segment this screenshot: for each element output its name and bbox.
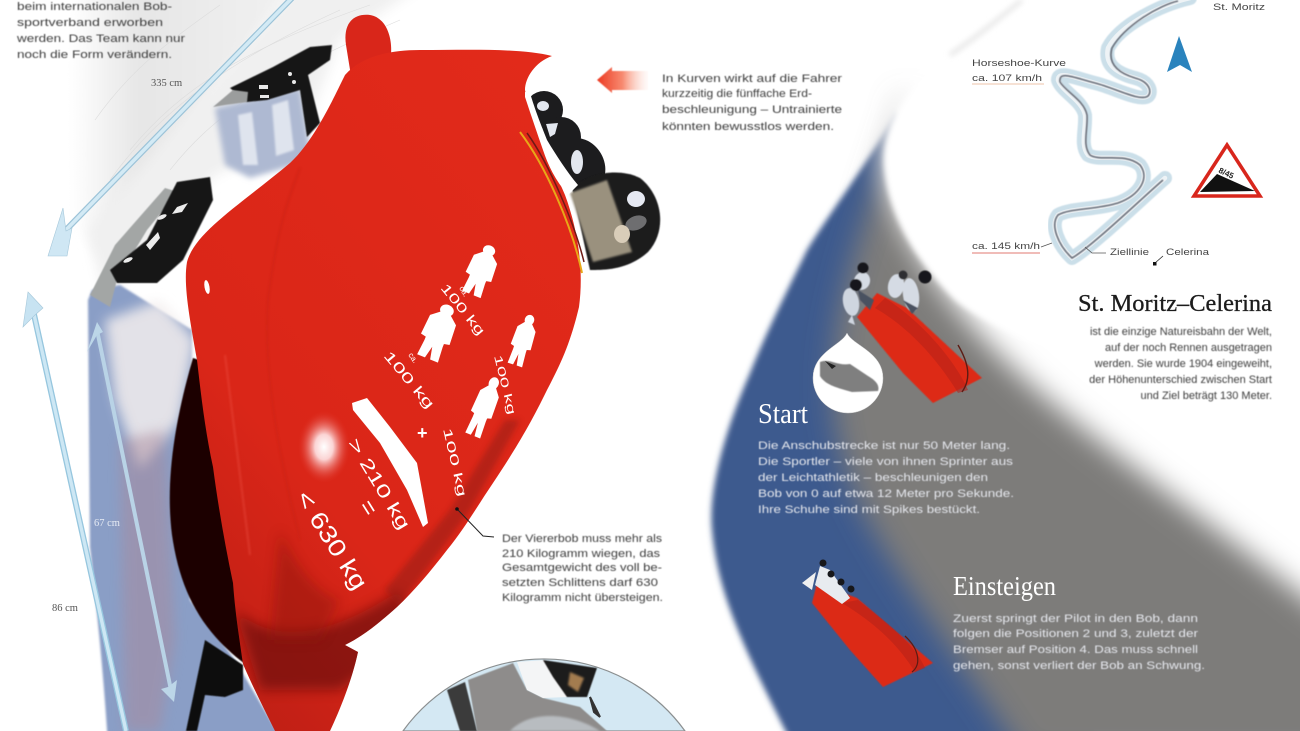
body shadow group <box>235 168 520 690</box>
text block: Start: Die Anschubstrecke ist nur 50 Meter lang. <box>758 440 1010 452</box>
text block: regulations top left <box>16 1 185 61</box>
snow wall soft lower edge <box>863 88 1300 619</box>
dimension arrow: 86 cm <box>23 292 126 731</box>
text block: Start: Ihre Schuhe sind mit Spikes bestückt. <box>758 504 980 516</box>
rider figure 2 <box>413 299 463 364</box>
text block: St. Moritz-Celerina: der Höhenunterschied zwischen Start <box>1089 374 1272 386</box>
callout: sled weight: Gesamtgewicht des voll be- <box>502 562 662 574</box>
label: Celerina: Celerina <box>1166 247 1210 258</box>
sled dark underside <box>170 358 320 664</box>
text block: Einsteigen: Zuerst springt der Pilot in den Bob, dann <box>953 613 1198 625</box>
label: St. Moritz: St. Moritz <box>1213 2 1265 13</box>
runner: lower <box>90 177 213 307</box>
icon: gradient warning sign: 8/45 <box>1217 166 1236 181</box>
runner: rear <box>186 640 243 731</box>
dimension arrow: 335 cm <box>48 0 292 256</box>
weight labels: = <box>353 495 383 521</box>
text block: St. Moritz-Celerina: auf der noch Rennen ausgetragen <box>1105 342 1272 354</box>
weight labels: < 630 kg <box>290 486 373 595</box>
wall top line <box>950 0 1022 55</box>
text block: g-force: In Kurven wirkt auf die Fahrer <box>662 73 842 85</box>
track white lane <box>1055 0 1190 258</box>
track blue lane <box>706 116 1034 731</box>
text block: g-force: könnten bewusstlos werden. <box>662 121 834 133</box>
dimension arrow: 67 cm <box>87 322 177 702</box>
cowling edge stripes <box>520 132 582 273</box>
text block: Start: Die Sportler – viele von ihnen Sprinter aus <box>758 456 1014 468</box>
label: Horseshoe-Kurve: Horseshoe-Kurve <box>972 58 1066 69</box>
text block: Einsteigen <box>953 613 1205 672</box>
rider figure 4 <box>462 373 506 440</box>
callout: sled weight: Der Viererbob muss mehr als <box>502 533 663 545</box>
weight labels: ca. <box>406 351 420 365</box>
panel: track map <box>972 0 1265 266</box>
callout: sled weight: setzten Schlittens darf 630 <box>502 577 658 589</box>
callout: sled weight: Kilogramm nicht übersteigen. <box>502 592 663 604</box>
highlight: shine <box>298 411 350 483</box>
label: 335 cm: 335 cm <box>151 78 182 89</box>
rider figure 3 <box>505 312 541 368</box>
weight labels: + <box>417 423 428 443</box>
text block: St. Moritz-Celerina: und Ziel beträgt 130 Meter. <box>1141 390 1272 402</box>
callout: sled weight: 210 Kilogramm wiegen, das <box>502 548 661 560</box>
snow wall crisp upper edge <box>880 113 994 322</box>
highlight: small shine <box>203 280 211 294</box>
text block: regulations top left: werden. Das Team kann nur <box>16 33 185 45</box>
helmets: crew behind cowling <box>525 91 660 270</box>
rear fin <box>345 15 391 82</box>
text block: regulations top left: noch die Form verändern. <box>17 49 172 61</box>
text block: Einsteigen: folgen die Positionen 2 und 3, zuletzt der <box>953 628 1198 640</box>
heading: St. Moritz-Celerina: St. Moritz–Celerina <box>1078 291 1272 317</box>
shadow of sled on ice <box>88 88 312 731</box>
text block: g-force <box>662 73 842 133</box>
panel: red bobsled body <box>186 50 584 731</box>
text block: g-force: beschleunigung – Untrainierte <box>662 104 842 116</box>
text block: Einsteigen: Bremser auf Position 4. Das muss schnell <box>953 644 1198 656</box>
text block: Start: Bob von 0 auf etwa 12 Meter pro Sekunde. <box>758 488 1014 500</box>
text block: Start <box>758 440 1014 516</box>
sled weight silhouette <box>352 398 428 527</box>
text block: regulations top left: beim internationalen Bob- <box>17 1 172 13</box>
pilot helmet <box>572 173 660 270</box>
label: Ziellinie: Ziellinie <box>1110 247 1149 258</box>
runner: upper <box>213 45 332 137</box>
track dark line <box>1055 1 1178 258</box>
label: 107 km/h: ca. 107 km/h <box>972 73 1042 84</box>
white cockpit rim <box>525 92 578 195</box>
label: 86 cm: 86 cm <box>52 603 78 614</box>
weight labels: ca. <box>457 284 470 298</box>
pilot visor <box>570 180 632 262</box>
label: 67 cm: 67 cm <box>94 518 120 529</box>
icon: gradient warning sign <box>1194 145 1260 196</box>
weight labels: 100 kg <box>491 354 517 416</box>
icon: north arrow <box>1167 36 1192 72</box>
text block: St. Moritz-Celerina <box>1089 326 1272 402</box>
heading: Start: Start <box>758 399 808 430</box>
track outer glow <box>1055 0 1190 258</box>
runners <box>841 262 932 325</box>
text block: g-force: kurzzeitig die fünffache Erd- <box>662 88 812 100</box>
detail circle: cockpit view <box>403 659 685 731</box>
text block: St. Moritz-Celerina: werden. Sie wurde 1904 eingeweiht, <box>1094 358 1272 370</box>
callout: sled weight <box>455 507 663 604</box>
label: 145 km/h: ca. 145 km/h <box>972 241 1040 252</box>
highlight: side streak <box>225 355 250 555</box>
text block: Start: der Leichtathletik – beschleunigen den <box>758 472 988 484</box>
text block: St. Moritz-Celerina: ist die einzige Natureisbahn der Welt, <box>1090 326 1272 338</box>
track gray band <box>832 95 1300 731</box>
weight labels: > 210 kg <box>344 435 414 533</box>
panel: ice track <box>711 0 1300 731</box>
weight labels: 100 kg <box>440 427 469 498</box>
ice wash behind sled nose <box>87 0 400 284</box>
illustration: start bob with runners <box>841 262 982 403</box>
text block: Einsteigen: gehen, sonst verliert der Bob an Schwung. <box>953 660 1205 672</box>
heading: Einsteigen: Einsteigen <box>953 571 1056 601</box>
text block: regulations top left: sportverband erworben <box>17 17 163 29</box>
illustration: boarding bob <box>802 560 933 687</box>
rider figure 1 <box>459 241 504 300</box>
arrow: g-force red <box>597 67 648 93</box>
weight labels: 100 kg <box>438 280 488 338</box>
icon: spiked shoe in bubble <box>813 333 883 413</box>
weight labels <box>290 280 517 595</box>
weight labels: 100 kg <box>381 348 438 412</box>
